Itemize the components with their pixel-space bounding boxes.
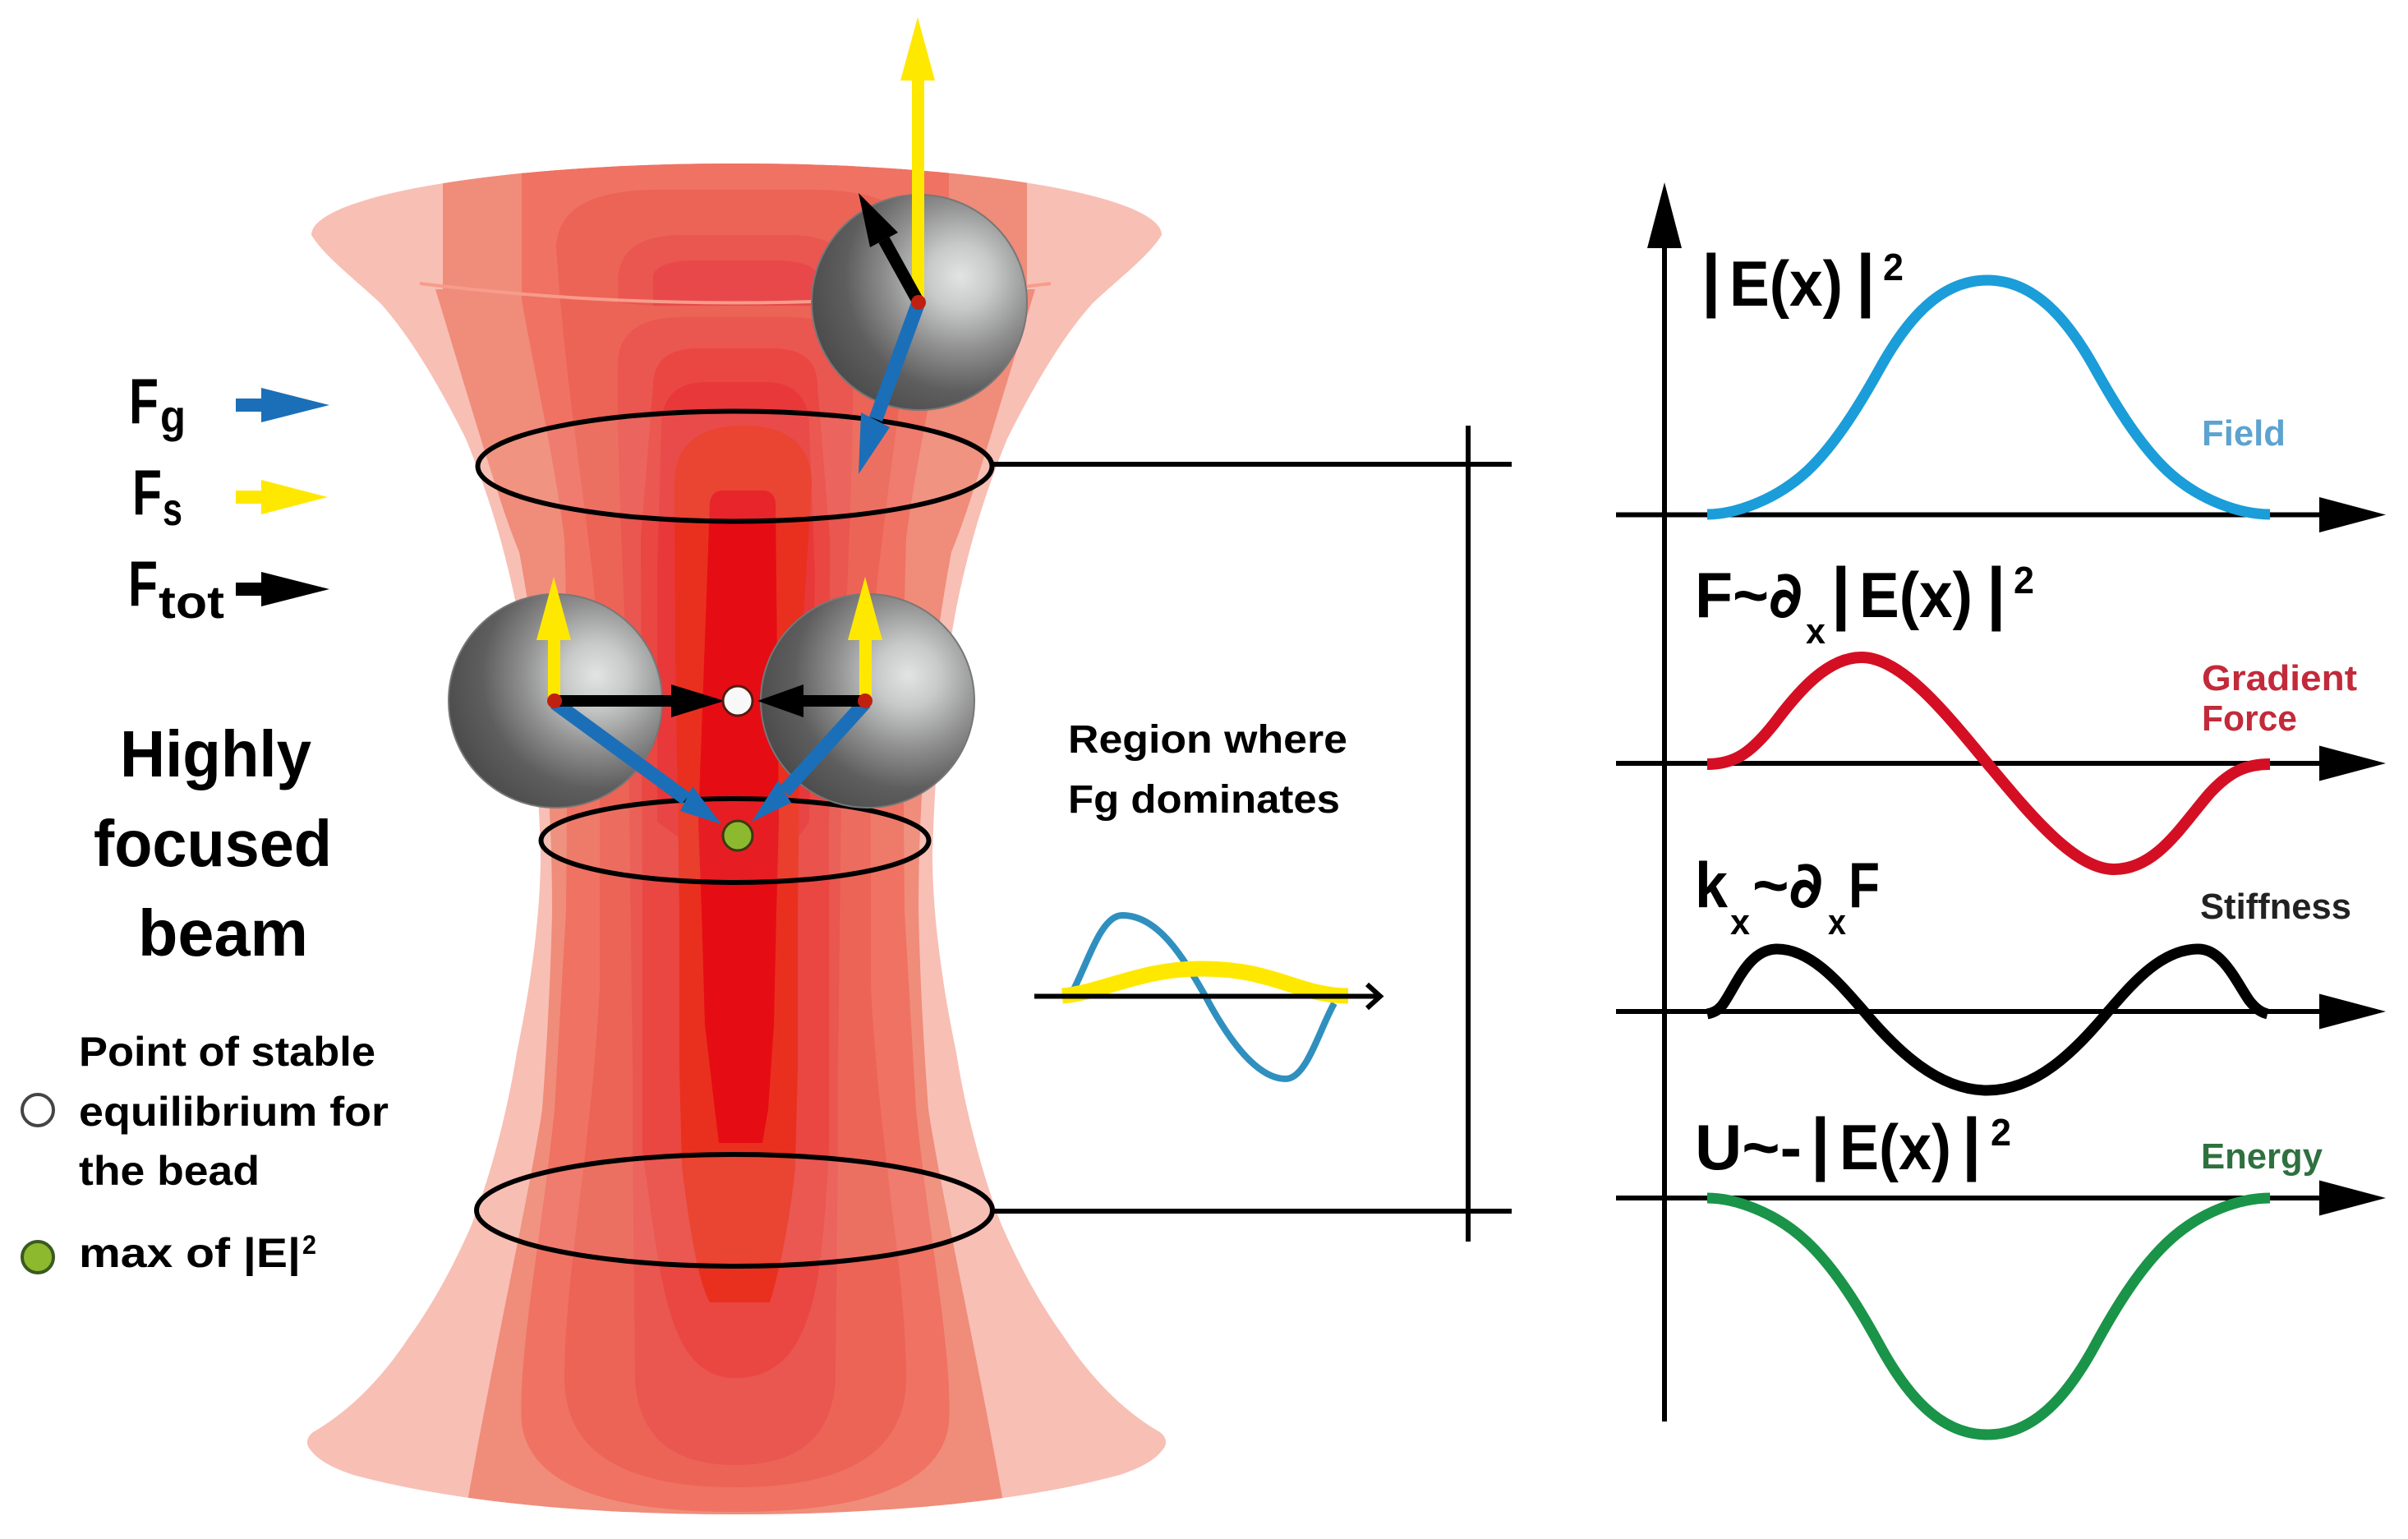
force label: Gradient — [2202, 658, 2357, 698]
energy axis — [1616, 1180, 2386, 1216]
energy curve — [1707, 1198, 2270, 1435]
energy formula — [1695, 1104, 2011, 1183]
legend: total force: tot — [159, 576, 224, 628]
bead: right — [761, 594, 974, 808]
arrow: top bead total force — [859, 193, 919, 302]
energy formula: | — [1811, 1104, 1830, 1182]
legend: max field text: max of |E| — [79, 1230, 301, 1277]
force formula: E(x) — [1859, 559, 1973, 631]
legend: equilibrium text: the bead — [79, 1148, 260, 1194]
field axis — [1616, 497, 2386, 532]
energy formula: | — [1962, 1104, 1982, 1182]
force formula: | — [1987, 554, 2006, 632]
arrow: right bead scattering force — [848, 577, 882, 701]
field formula — [1701, 241, 1904, 320]
field formula: | — [1701, 241, 1721, 319]
small chart: gradient vs scattering force — [1034, 915, 1380, 1079]
cross-section ring: focus — [541, 799, 928, 882]
arrow: right bead gradient force — [752, 703, 865, 822]
arrow: left bead gradient force — [555, 703, 721, 824]
stiffness formula: x — [1730, 902, 1751, 942]
energy formula: U~- — [1695, 1111, 1802, 1183]
legend: equilibrium text — [79, 1029, 389, 1194]
arrow: right bead total force — [757, 684, 865, 717]
legend: gradient force — [129, 365, 329, 442]
field curve — [1707, 280, 2270, 514]
stiffness label: Stiffness — [2200, 887, 2351, 927]
heading: highly focused beam — [94, 717, 332, 970]
heading: highly focused beam: beam — [138, 896, 308, 970]
graph: field — [1616, 241, 2386, 532]
stiffness formula: F — [1849, 849, 1880, 921]
force formula: F~∂ — [1695, 559, 1803, 633]
graph: gradient force — [1616, 554, 2386, 869]
max field point — [723, 821, 753, 850]
heading: highly focused beam: Highly — [120, 717, 311, 790]
legend: max field text: 2 — [302, 1230, 316, 1260]
field formula: | — [1856, 241, 1876, 319]
force formula: x — [1806, 611, 1826, 652]
legend: max field marker — [22, 1242, 53, 1273]
graphs: vertical axis — [1647, 182, 1682, 1422]
stiffness formula: ~∂ — [1752, 849, 1823, 923]
legend: total force — [128, 547, 329, 628]
force formula: | — [1831, 554, 1851, 632]
arrow: top bead gradient force — [859, 302, 919, 474]
bead: left — [449, 594, 662, 808]
focused beam hourglass — [296, 156, 1183, 1520]
heading: highly focused beam: focused — [94, 807, 332, 880]
cross-section ring: bottom — [477, 1154, 992, 1266]
energy formula: 2 — [1991, 1111, 2011, 1154]
legend: total force: F — [128, 547, 158, 620]
stiffness formula: k — [1695, 849, 1729, 921]
cross-section ring: top — [478, 411, 992, 521]
bead center dots — [547, 295, 926, 708]
stiffness formula — [1695, 849, 1880, 942]
energy label: Energy — [2201, 1136, 2323, 1177]
arrow: top bead scattering force — [900, 17, 935, 302]
text: region where Fg dominates — [1068, 718, 1347, 822]
energy formula: E(x) — [1839, 1111, 1951, 1183]
force curve — [1707, 657, 2270, 869]
bracket connecting rings to graphs — [992, 426, 1512, 1242]
legend: equilibrium text: Point of stable — [79, 1029, 375, 1075]
field formula: 2 — [1883, 246, 1904, 288]
force formula — [1695, 554, 2034, 652]
force label: Force — [2202, 698, 2297, 739]
stable equilibrium point — [723, 686, 753, 716]
text: region where Fg dominates: Fg dominates — [1068, 778, 1340, 822]
legend: gradient force: F — [129, 365, 159, 437]
legend: equilibrium marker — [22, 1094, 53, 1126]
text: region where Fg dominates: Region where — [1068, 718, 1347, 762]
field label: Field — [2202, 413, 2286, 454]
stiffness axis — [1616, 994, 2386, 1029]
stiffness curve — [1707, 949, 2268, 1090]
stiffness formula: x — [1828, 902, 1846, 942]
legend: scattering force — [132, 456, 328, 535]
legend: scattering force: s — [163, 483, 182, 535]
force formula: 2 — [2014, 559, 2034, 601]
arrow: left bead total force — [555, 684, 725, 717]
legend: gradient force: g — [160, 390, 186, 442]
bead: top — [812, 195, 1027, 410]
arrow: left bead scattering force — [536, 577, 571, 701]
legend: equilibrium text: equilibrium for — [79, 1089, 389, 1135]
field formula: E(x) — [1729, 247, 1843, 320]
force axis — [1616, 746, 2386, 781]
graph: stiffness — [1616, 849, 2386, 1090]
graph: energy — [1616, 1104, 2386, 1435]
legend: scattering force: F — [132, 456, 162, 528]
force label — [2202, 658, 2357, 739]
